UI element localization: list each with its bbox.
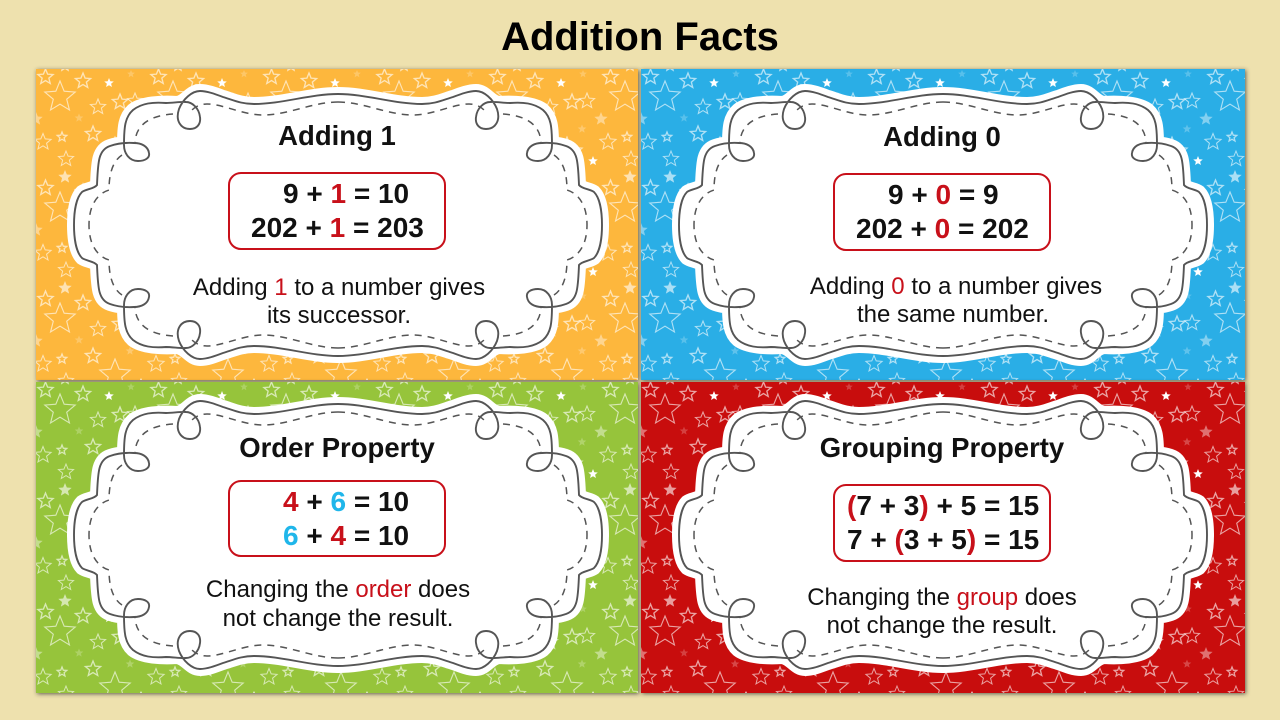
explanation: not change the result.	[223, 605, 453, 632]
heading: Order Property	[239, 432, 436, 463]
green star background	[36, 382, 638, 693]
red star background	[641, 382, 1245, 693]
heading: Adding 1	[278, 120, 396, 151]
explanation: its successor.	[267, 302, 411, 329]
blue star background	[641, 69, 1245, 380]
decorative frame	[74, 91, 602, 359]
explanation: not change the result.	[827, 612, 1057, 639]
equation box	[834, 174, 1050, 250]
decorative frame	[679, 91, 1207, 359]
equation box: 9 + 0 = 9	[888, 179, 999, 210]
explanation: Adding 1 to a number gives	[193, 274, 485, 301]
explanation: Adding 0 to a number gives	[810, 273, 1102, 300]
equation box	[229, 481, 445, 556]
explanation	[206, 576, 470, 632]
decorative frame	[74, 401, 602, 669]
explanation	[807, 584, 1077, 639]
explanation: Changing the order does	[206, 576, 470, 603]
heading: Grouping Property	[820, 432, 1065, 463]
equation box	[229, 173, 445, 249]
equation box: (7 + 3) + 5 = 15	[847, 490, 1039, 521]
panel: Grouping Property	[641, 382, 1245, 693]
equation box: 202 + 1 = 203	[251, 212, 424, 243]
explanation: the same number.	[857, 301, 1049, 328]
equation box: 6 + 4 = 10	[283, 520, 409, 551]
equation box: 9 + 1 = 10	[283, 178, 409, 209]
equation box: 202 + 0 = 202	[856, 213, 1029, 244]
panel: Adding 1	[36, 69, 638, 380]
explanation: Changing the group does	[807, 584, 1077, 611]
heading: Adding 0	[883, 121, 1001, 152]
equation box: 7 + (3 + 5) = 15	[847, 524, 1039, 555]
decorative frame	[679, 401, 1207, 669]
explanation	[193, 274, 485, 329]
equation box	[834, 485, 1050, 561]
explanation	[810, 273, 1102, 328]
title: Addition Facts	[501, 15, 779, 59]
orange star background	[36, 69, 638, 380]
panel: Adding 0	[641, 69, 1245, 380]
equation box: 4 + 6 = 10	[283, 486, 409, 517]
panel: Order Property	[36, 382, 638, 693]
